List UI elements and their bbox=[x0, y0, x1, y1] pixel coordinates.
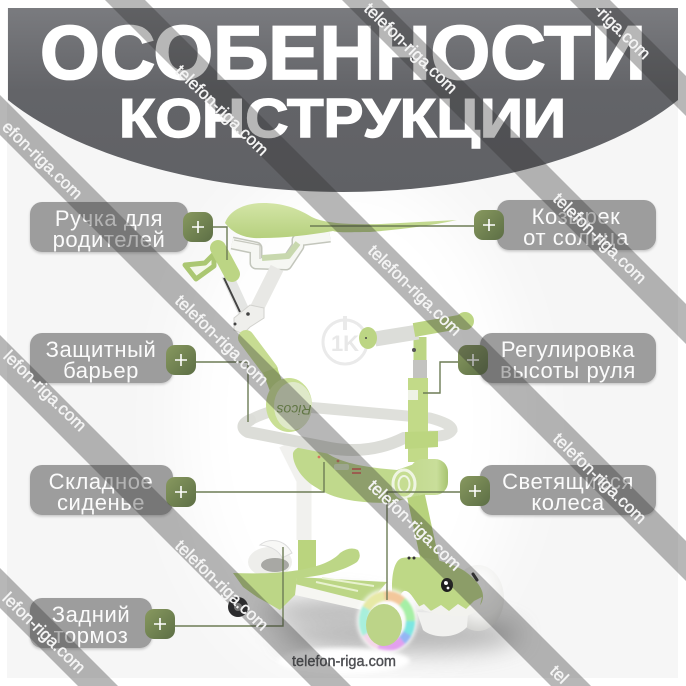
plus button: brake bbox=[145, 609, 175, 639]
watermark text: lefon-riga.com bbox=[0, 347, 90, 435]
watermark text: telefon-riga.com bbox=[171, 536, 272, 635]
post green base bbox=[298, 540, 316, 572]
callout: Светящиеся колеса bbox=[480, 465, 656, 515]
title: ОСОБЕННОСТИ bbox=[40, 11, 646, 96]
handlebar bbox=[359, 312, 474, 352]
callout: Ручка для родителей: Ручка для bbox=[55, 206, 163, 231]
callout: Козырек от солнца bbox=[497, 200, 656, 250]
small black caster bbox=[228, 597, 248, 617]
callout: Ручка для родителей: родителей bbox=[53, 227, 165, 252]
deck bbox=[295, 577, 387, 610]
scooter neck bbox=[416, 496, 432, 570]
front white wheel bbox=[452, 565, 504, 631]
title bbox=[40, 11, 646, 149]
watermark text: -riga.com bbox=[590, 0, 654, 63]
glowing rainbow wheel bbox=[354, 586, 420, 656]
sun canopy bbox=[225, 203, 457, 238]
watermark text: telefon-riga.com bbox=[364, 241, 465, 340]
plus button: canopy bbox=[474, 210, 504, 240]
plus button: handle bbox=[183, 212, 213, 242]
stem clamp bbox=[405, 431, 438, 449]
folding arm bbox=[256, 268, 277, 310]
callout: Складное сиденье: сиденье bbox=[57, 490, 145, 515]
watermark text: telefon-riga.com bbox=[549, 189, 650, 288]
Ricos logo disc bbox=[266, 378, 312, 432]
callout: Задний тормоз: Задний bbox=[52, 602, 130, 627]
header banner bbox=[8, 8, 678, 192]
callout: Светящиеся колеса: колеса bbox=[531, 490, 605, 515]
callout: Складное сиденье bbox=[30, 465, 173, 515]
plus button: height bbox=[458, 345, 488, 375]
callout: Складное сиденье: Складное bbox=[49, 469, 153, 494]
seat post bbox=[286, 444, 304, 540]
barrier rear bbox=[250, 407, 452, 436]
watermark text: telefon-riga.com bbox=[171, 291, 272, 390]
callout: Светящиеся колеса: Светящиеся bbox=[502, 469, 634, 494]
callout: Регулировка высоты руля: Регулировка bbox=[501, 337, 635, 362]
scooter illustration bbox=[185, 203, 520, 656]
plus button: barrier bbox=[166, 345, 196, 375]
leader lines bbox=[175, 226, 474, 626]
callout: Задний тормоз bbox=[30, 598, 152, 648]
Ricos logo disc: Ricos bbox=[276, 402, 312, 418]
bottom site label: telefon-riga.com bbox=[292, 654, 396, 670]
seat bbox=[293, 446, 440, 503]
folding joint bbox=[234, 305, 264, 334]
ground shadow bbox=[265, 598, 520, 653]
stem cylinder bbox=[393, 459, 448, 498]
lower handle tube bbox=[246, 338, 270, 370]
barrier front bbox=[243, 420, 404, 450]
handle grip bbox=[218, 248, 232, 274]
callout: Регулировка высоты руля bbox=[480, 333, 656, 383]
parent handle loop bbox=[185, 254, 214, 279]
plus button: seat bbox=[166, 477, 196, 507]
callout: Козырек от солнца: Козырек bbox=[532, 204, 620, 229]
watermark text: telefon-riga.com bbox=[171, 61, 272, 160]
bottom site label bbox=[278, 648, 410, 674]
rear fender bbox=[233, 549, 360, 610]
watermark text: telefon-riga.com bbox=[360, 0, 461, 98]
faint 1K logo bbox=[323, 316, 367, 364]
callout: Козырек от солнца: от солнца bbox=[523, 225, 629, 250]
watermark text: telefon-riga.com bbox=[549, 429, 650, 528]
callout: Защитный барьер bbox=[30, 333, 173, 383]
watermark text: efon-riga.com bbox=[0, 117, 86, 203]
callout: Ручка для родителей bbox=[30, 202, 188, 252]
canopy frame bbox=[232, 236, 330, 264]
steering stem bbox=[408, 337, 420, 462]
plus button: wheels bbox=[460, 476, 490, 506]
handle pole bbox=[224, 275, 244, 312]
callout: Защитный барьер: Защитный bbox=[46, 337, 156, 362]
faint 1K logo: 1K bbox=[331, 331, 359, 356]
callout: Регулировка высоты руля: высоты руля bbox=[500, 358, 636, 383]
callout: Защитный барьер: барьер bbox=[63, 358, 139, 383]
watermark text: lefon-riga.com bbox=[0, 589, 89, 677]
title: КОНСТРУКЦИИ bbox=[119, 87, 566, 149]
watermark text: telefon-riga.com bbox=[364, 476, 465, 575]
dinosaur head bbox=[392, 556, 483, 636]
callout: Задний тормоз: тормоз bbox=[54, 623, 128, 648]
rear white wheel bbox=[248, 540, 292, 577]
back green tube bbox=[270, 370, 285, 410]
